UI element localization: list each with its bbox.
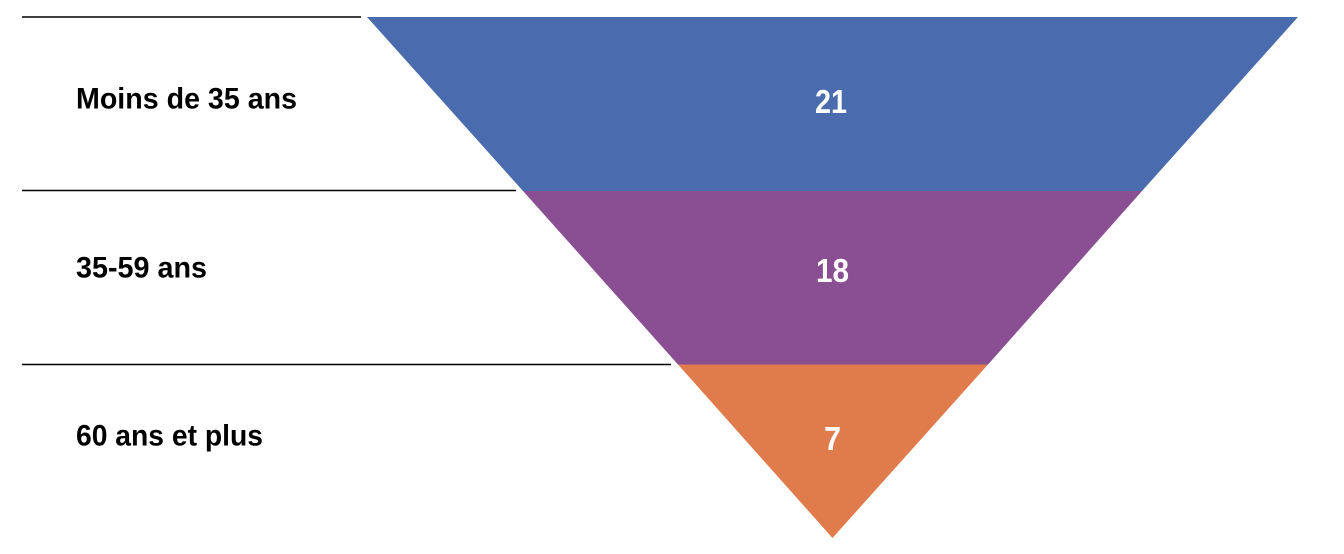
- row: 60 ans et plus: 60 ans et plus: [76, 420, 263, 452]
- row: 35-59 ans: 18: [816, 252, 849, 289]
- row: Moins de 35 ans: Moins de 35 ans: [76, 82, 297, 116]
- row: 35-59 ans: [22, 190, 1142, 364]
- row: 60 ans et plus: [22, 364, 988, 538]
- row: 60 ans et plus: 7: [824, 420, 841, 457]
- row: Moins de 35 ans: 21: [815, 83, 847, 120]
- row: Moins de 35 ans: [22, 17, 1298, 191]
- row: 35-59 ans: 35-59 ans: [76, 252, 207, 284]
